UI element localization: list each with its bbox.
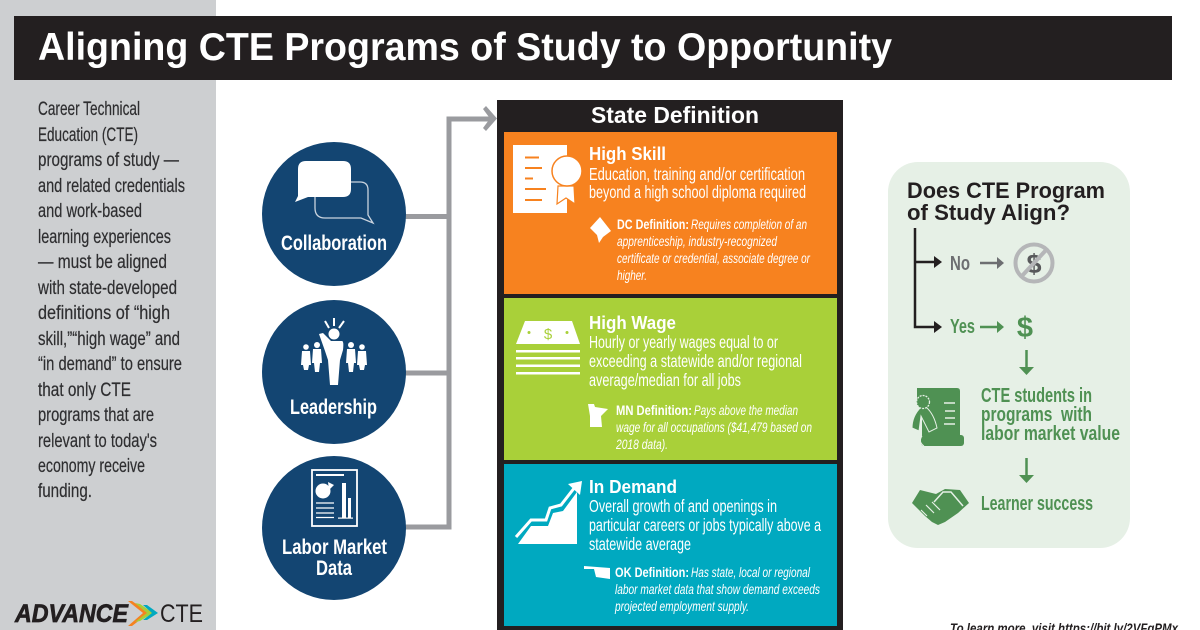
logo: Advance CTE: CTE (160, 600, 203, 628)
sidebar description text: learning experiences (38, 227, 171, 248)
panel: High Wage: Pays above the median (694, 403, 798, 418)
panel: High Skill: apprenticeship, industry-recognized (617, 234, 777, 249)
panel: High Wage: exceeding a statewide and/or regional (589, 351, 802, 371)
No outcome: No (950, 253, 970, 275)
circle: Leadership (262, 300, 406, 444)
panel: In Demand: statewide average (589, 534, 691, 554)
circle: Leadership: Leadership (290, 396, 377, 419)
panel: High Skill: certificate or credential, associate degree or (617, 251, 810, 266)
circle: Labor Market Data: Labor Market (282, 536, 387, 559)
sidebar description text: definitions of “high (38, 303, 170, 324)
arrow down (1019, 350, 1034, 375)
panel: High Wage: wage for all occupations ($41,479 based on (616, 420, 812, 435)
text: CTE students: programs with (981, 404, 1092, 426)
sidebar description text: “in demand” to ensure (38, 354, 182, 375)
heading: Does CTE Program (907, 178, 1105, 203)
No outcome: $ (1026, 249, 1042, 279)
panel: High Skill: beyond a high school diploma required (589, 182, 806, 202)
flow branch lines (915, 228, 942, 333)
panel: High Wage: High Wage (589, 313, 676, 333)
text: CTE students: labor market value (981, 423, 1120, 445)
text: Learner success: Learner success (981, 493, 1093, 515)
icon: Oklahoma map (584, 566, 610, 579)
icon: diploma (912, 388, 964, 446)
panel: In Demand: In Demand (589, 477, 677, 497)
panel: High Wage: average/median for all jobs (589, 370, 741, 390)
panel: In Demand: projected employment supply. (614, 599, 749, 614)
heading: of Study Align? (907, 200, 1070, 225)
icon: handshake (912, 489, 969, 525)
panel: Does CTE Program of Study Align (888, 162, 1130, 548)
icon: speech bubbles (295, 161, 373, 223)
panel: In Demand: labor market data that show demand exceeds (615, 582, 820, 597)
panel: High Wage: Hourly or yearly wages equal to or (589, 332, 778, 352)
sidebar description text: skill,”“high wage” and (38, 329, 180, 350)
panel: In Demand: Has state, local or regional (691, 565, 811, 580)
icon: leader with team (301, 318, 367, 385)
Yes outcome: $ (1017, 312, 1033, 344)
circle: Collaboration: Collaboration (281, 232, 387, 255)
icon: report (312, 470, 357, 526)
panel: state definition (497, 100, 843, 630)
Yes outcome: Yes (950, 316, 975, 338)
circle: Labor Market Data: Data (316, 557, 352, 580)
icon: money stack (516, 321, 580, 374)
Yes outcome (950, 312, 1033, 344)
heading: State Definition: State Definition (591, 102, 759, 128)
sidebar description text: programs that are (38, 405, 154, 426)
sidebar description text: funding. (38, 481, 92, 502)
title: Aligning CTE Programs of Study to Opportunity (38, 26, 892, 69)
sidebar panel (0, 0, 216, 630)
sidebar description text: with state-developed (37, 278, 177, 299)
No outcome (950, 244, 1052, 282)
panel: High Wage: 2018 data). (615, 437, 668, 452)
panel: High Wage: MN Definition: (616, 403, 692, 418)
sidebar description text: Career Technical (38, 99, 140, 120)
panel: High Skill: Requires completion of an (691, 217, 807, 232)
sidebar description text: programs of study — (38, 150, 179, 171)
sidebar description text: economy receive (38, 456, 145, 477)
logo: Advance CTE: ADVANCE (14, 600, 129, 628)
title bar (14, 16, 1172, 80)
circle: Labor Market Data (262, 456, 406, 600)
panel: In Demand (504, 464, 837, 626)
text: CTE students: CTE students in (981, 385, 1092, 407)
icon: money stack: $ (544, 326, 553, 343)
panel: High Wage (504, 298, 837, 460)
sidebar description text: Education (CTE) (38, 125, 138, 146)
sidebar description text (37, 99, 185, 502)
sidebar description text: — must be aligned (38, 252, 167, 273)
sidebar description text: and work-based (38, 201, 142, 222)
icon: growth chart (516, 481, 582, 544)
panel: High Skill: DC Definition: (617, 217, 689, 232)
panel: In Demand: particular careers or jobs typically above a (589, 515, 821, 535)
panel: High Skill: higher. (617, 268, 647, 283)
panel: High Skill: High Skill (589, 144, 666, 164)
panel: In Demand: OK Definition: (615, 565, 689, 580)
icon: Minnesota map (588, 404, 608, 427)
heading (907, 178, 1105, 225)
icon: DC map (590, 217, 611, 243)
arrow down (1019, 458, 1034, 483)
sidebar description text: relevant to today's (38, 431, 157, 452)
panel: High Skill: Education, training and/or certification (589, 164, 805, 184)
connector arrow (403, 106, 497, 527)
text: CTE students (981, 385, 1120, 445)
circle: Collaboration (262, 142, 406, 286)
sidebar description text: and related credentials (38, 176, 185, 197)
panel: High Skill (504, 132, 837, 294)
logo: Advance CTE (14, 600, 203, 628)
icon: certificate (513, 145, 582, 213)
panel: In Demand: Overall growth of and openings in (589, 496, 777, 516)
sidebar description text: that only CTE (38, 380, 131, 401)
